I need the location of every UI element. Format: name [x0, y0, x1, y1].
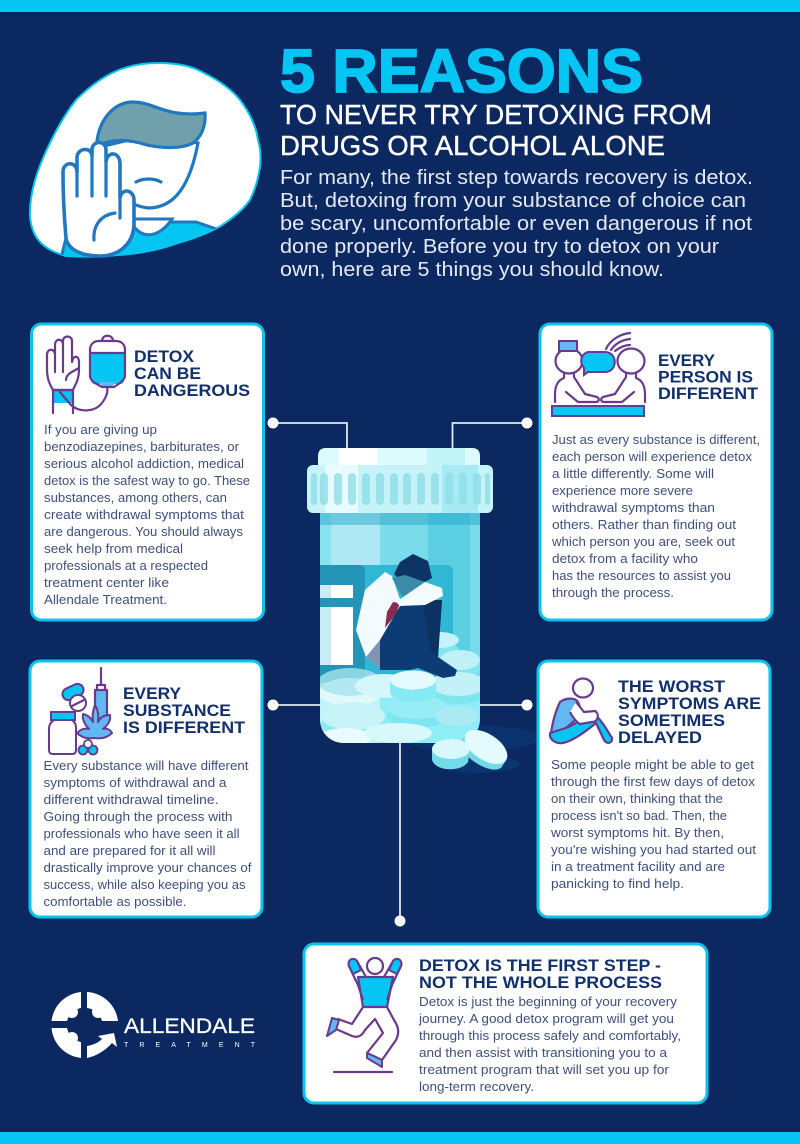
body text: a little differently. Some will: [552, 466, 714, 481]
intro paragraph: done properly. Before you try to detox on your: [280, 236, 719, 258]
hero illustration: man raising hand: [30, 63, 261, 262]
body text: through this process safely and comfortably,: [419, 1028, 681, 1043]
logo: Allendale Treatment: TREATMENT: [124, 1042, 256, 1049]
heading: [419, 957, 662, 992]
body text: [44, 758, 252, 909]
loose tablets: [456, 723, 513, 776]
body text: and are prepared for it all will: [44, 843, 216, 858]
intro paragraph: For many, the first step towards recovery is detox.: [280, 167, 753, 189]
subtitle: TO NEVER TRY DETOXING FROM: [280, 99, 712, 130]
body text: worst symptoms hit. By then,: [550, 825, 724, 840]
body text: Going through the process with: [44, 809, 232, 824]
body text: Detox is just the beginning of your recovery: [419, 994, 678, 1009]
heading: [134, 348, 250, 400]
bottom bar: [0, 1132, 800, 1144]
body text: Just as every substance is different,: [552, 432, 760, 447]
body text: Every substance will have different: [44, 758, 249, 773]
heading: DETOX: [134, 348, 194, 366]
logo: Allendale Treatment: [52, 992, 256, 1058]
body text: [550, 757, 756, 891]
heading: EVERY: [658, 352, 715, 370]
heading: DIFFERENT: [658, 385, 758, 403]
heading: IS DIFFERENT: [123, 719, 245, 737]
body text: has the resources to assist you: [552, 568, 731, 583]
heading: [658, 352, 758, 403]
body text: journey. A good detox program will get you: [418, 1011, 674, 1026]
body text: in a treatment facility and are: [551, 859, 725, 874]
intro paragraph: [280, 167, 753, 281]
body text: detox is the safest way to go. These: [44, 473, 250, 488]
cap: [318, 448, 480, 465]
heading: [618, 678, 761, 747]
top bar: [0, 0, 800, 12]
body text: withdrawal symptoms than: [551, 500, 715, 515]
body text: others. Rather than finding out: [552, 517, 736, 532]
heading: DANGEROUS: [134, 382, 250, 400]
body text: treatment center like: [44, 575, 169, 590]
body text: through the first few days of detox: [551, 774, 756, 789]
body text: create withdrawal symptoms that: [44, 507, 244, 522]
card: every substance is different: [30, 661, 262, 917]
person: [356, 572, 402, 657]
body text: experience more severe: [552, 483, 693, 498]
body text: panicking to find help.: [551, 876, 684, 891]
heading: THE WORST: [618, 678, 725, 696]
intro paragraph: be scary, uncomfortable or even dangerous if not: [280, 213, 752, 235]
icon: jumping figure: [327, 958, 401, 1072]
card: every person is different: [540, 324, 772, 620]
heading: DELAYED: [618, 729, 702, 747]
card: first step: [304, 944, 707, 1103]
heading: NOT THE WHOLE PROCESS: [419, 974, 662, 992]
body text: success, while also keeping you as: [44, 877, 246, 892]
body text: detox from a facility who: [552, 551, 698, 566]
heading: SUBSTANCE: [123, 702, 231, 720]
heading: DETOX IS THE FIRST STEP -: [419, 957, 661, 975]
title: 5 REASONS: [280, 37, 643, 105]
icon: two people talking: [552, 333, 645, 416]
pill bottle with person: [307, 448, 540, 776]
body text: serious alcohol addiction, medical: [44, 456, 244, 471]
body text: professionals at a respected: [44, 558, 208, 573]
body text: through the process.: [552, 585, 674, 600]
body text: symptoms of withdrawal and a: [44, 775, 227, 790]
body text: on their own, thinking that the: [551, 791, 723, 806]
body text: treatment program that will set you up for: [419, 1062, 670, 1077]
body text: each person will experience detox: [552, 449, 753, 464]
heading: PERSON IS: [658, 368, 753, 386]
icon: bottle, pills, syringe, leaf: [49, 668, 112, 754]
heading: SYMPTOMS ARE: [618, 695, 761, 713]
body text: process isn't so bad. Then, the: [551, 808, 727, 823]
heading: CAN BE: [134, 365, 201, 383]
card: worst symptoms delayed: [538, 661, 770, 917]
heading: EVERY: [123, 685, 181, 703]
body text: drastically improve your chances of: [44, 860, 252, 875]
body text: If you are giving up: [44, 422, 157, 437]
subtitle: DRUGS OR ALCOHOL ALONE: [280, 130, 665, 161]
body text: long-term recovery.: [419, 1079, 534, 1094]
body text: different withdrawal timeline.: [44, 792, 218, 807]
card: detox can be dangerous: [32, 324, 264, 620]
body text: Allendale Treatment.: [44, 592, 167, 607]
intro paragraph: But, detoxing from your substance of choice can: [280, 190, 746, 212]
icon: hand and IV bag: [47, 336, 125, 413]
logo mark: [52, 992, 118, 1058]
body text: [418, 994, 681, 1094]
body text: benzodiazepines, barbiturates, or: [44, 439, 240, 454]
wordmark: ALLENDALE: [124, 1015, 255, 1038]
connector lines: [268, 418, 532, 926]
heading: SOMETIMES: [618, 712, 725, 730]
body text: comfortable as possible.: [44, 894, 186, 909]
body text: you're wishing you had started out: [551, 842, 756, 857]
body text: which person you are, seek out: [551, 534, 735, 549]
body text: Some people might be able to get: [551, 757, 754, 772]
body text: [44, 422, 250, 607]
icon: person hugging knees: [550, 678, 612, 743]
body text: substances, among others, can: [44, 490, 227, 505]
body text: seek help from medical: [44, 541, 183, 556]
intro paragraph: own, here are 5 things you should know.: [280, 259, 664, 281]
pills inside bottle: [318, 632, 486, 748]
body text: are dangerous. You should always: [44, 524, 243, 539]
body text: and then assist with transitioning you to a: [419, 1045, 668, 1060]
body text: professionals who have seen it all: [44, 826, 240, 841]
heading: [123, 685, 245, 737]
body text: [551, 432, 760, 600]
subtitle: [280, 99, 712, 161]
